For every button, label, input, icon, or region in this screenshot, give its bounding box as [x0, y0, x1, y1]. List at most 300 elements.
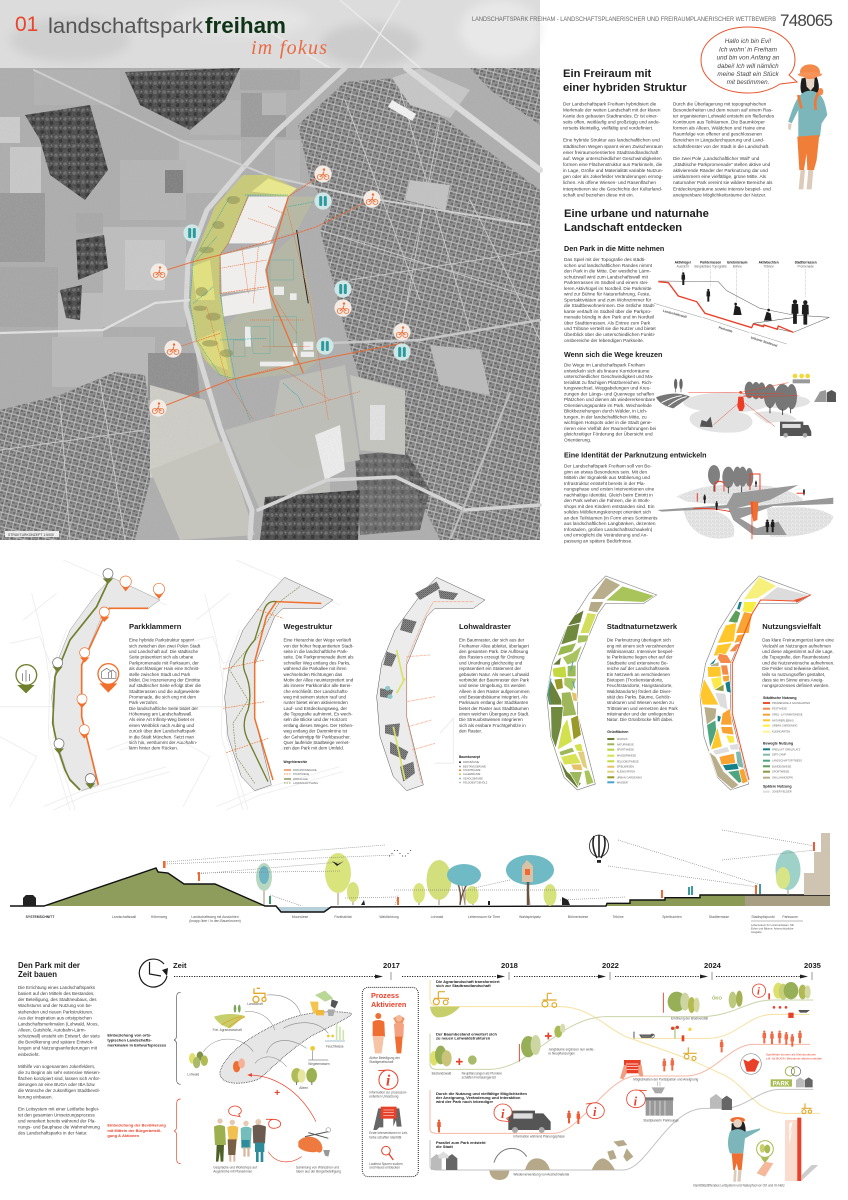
panel: design inputs [107, 988, 352, 1173]
map panel: Wegestruktur [173, 560, 354, 810]
text: time build: derungen an eine BUGA oder IBA bzw. [18, 1082, 96, 1087]
farmland fields [0, 68, 345, 540]
map text: Wildnisansatz. Intensiver bespiel- [607, 649, 674, 654]
map text: Ein Baumraster, der sich aus der [459, 638, 525, 643]
text: time build: und verankert bereits während der Pla- [18, 1119, 96, 1124]
map text: repräsentiert ein Statement der [459, 666, 522, 671]
text: time build: des Landschaftsparks in der Natur. [18, 1131, 88, 1136]
stream headings: Durch die Nutzung und vielfältige Möglichkeiten [436, 1091, 528, 1096]
existing trees [430, 1046, 477, 1066]
section labels: Landschaftsweg mit Aussichten [191, 915, 239, 919]
diagram labels: Aussicht [677, 265, 689, 269]
text: Wege kreuzen: entwickeln sich als lineare Korridorräume [564, 368, 650, 373]
caption: Information zur prozessori- [369, 1091, 407, 1095]
diagram labels: Bühne [733, 265, 742, 269]
text: Wege kreuzen: Orientierung. [564, 437, 591, 442]
excavated soil [489, 1158, 615, 1180]
text: time build: stehenden und neuen Parkstrukturen. [18, 1009, 93, 1014]
map text: die Topografie aufnimmt. Es wech- [284, 712, 353, 717]
text: Identität: Der Landschaftspark Freiham soll von Be- [564, 464, 652, 469]
text: Wege kreuzen: Orientierungspunkte im Park. Wechselnde [564, 403, 652, 408]
pavilion: i [634, 1094, 638, 1108]
diagram labels: Parkterrassen [700, 261, 721, 265]
info stele [785, 1118, 818, 1181]
planting captions: Neupflanzungen als Pioniere [462, 1071, 502, 1075]
recycling [607, 1140, 633, 1162]
map text: Feuchtstandorte, Hangstandorte, [607, 683, 672, 688]
section labels: Lebensraum für Luzerne/Hasen, Mit [751, 923, 794, 927]
text: Freiraum left column: formen eine Flächenstruktur aus Parkinseln, die [563, 162, 663, 167]
map text: entlang dieses Weges. Der Höhen- [284, 723, 354, 728]
subheading: Den Park in die Mitte nehmen: Den Park in die Mitte nehmen [564, 244, 664, 253]
map text: Als eine Art Infinity-Weg bietet er [129, 717, 195, 722]
speech bubble: meine Stadt ein Stück [717, 71, 779, 78]
legend: Nutzung: LANDSCHAFTSFITNESS [772, 759, 802, 763]
legend: Grünflächen: URBAN GARDENING [617, 775, 642, 779]
map text: und diese abgestimmt auf die Lage, [762, 649, 834, 654]
text: Freiraum left column: interpretieren sie die Geschichte der Kulturland- [563, 186, 663, 191]
map text: zurück über den Landschaftspark [129, 729, 196, 734]
truck caption: Information während Planungsphase [513, 1135, 565, 1139]
map text: strukturen und Wiesen werden zu [607, 700, 674, 705]
car [23, 895, 36, 906]
map text: reiche auf der Landschaftsseite. [607, 666, 670, 671]
diagram: crossing paths [656, 374, 836, 438]
label: landscape features: merkmalen in Entwurfsprozess [107, 1043, 167, 1048]
caption: farbe schaffen Identität [369, 1135, 401, 1139]
map text: Die Parknutzung überlagert sich [607, 638, 671, 643]
map text: Eine hybride Parkstruktur spannt [129, 638, 195, 643]
text: Freiraum left column: Eine hybride Struktur aus landschaftlichen und [563, 138, 660, 143]
stream headings [435, 979, 528, 1149]
legend: Grünflächen: NATURWIESE [617, 742, 634, 746]
map text: Stadtseite und extensivere Be- [607, 660, 668, 665]
captions: Augenhöhe mit Planerinnen [213, 1169, 253, 1173]
text: Park Mitte: onsbereiche der lebendigen Parkseite. [564, 338, 644, 343]
text: Identität: nachhaltige Identität. Gleich beim Eintritt in [564, 492, 653, 497]
stream headings: wird der Park noch lebendiger [435, 1099, 494, 1104]
title: 01 [15, 13, 38, 36]
legend: Nutzung: KLEINGÄRTEN [772, 730, 790, 734]
legend: Wegehierarchie: PARKALLEE [293, 777, 308, 781]
stream headings: Die Agrarlandschaft transformiert [436, 979, 500, 984]
map title: Parkklammern [129, 622, 182, 631]
section labels: (knapp über / in den Baumkronen) [189, 919, 241, 923]
diagram: topography section: Landschaftswall [662, 309, 687, 319]
captions [187, 1002, 344, 1090]
legend: Baumkonzept: FELDOBSTGEHÖLZ [463, 780, 488, 784]
eastern districts [225, 233, 318, 380]
hill and terrain [10, 868, 830, 912]
map panel: Stadtnaturnetzwerk [547, 576, 679, 790]
text: Wege kreuzen: gleichzeitiger Förderung der Übersicht und [564, 431, 653, 437]
young trees [519, 1024, 565, 1062]
text: Identität: passung an spätere Bedürfnisse. [564, 538, 633, 543]
panel heading: Aktivieren [371, 1000, 407, 1009]
captions: Ideen aus der Bürgerbeteiligung [296, 1169, 341, 1173]
section labels: Bühnenwiese [568, 915, 588, 919]
text: time build: Wachstums und der Nutzung von be- [18, 1003, 93, 1008]
section labels: Parkhabitat [334, 915, 352, 919]
speech bubble: Ich wohn' in Freiham [719, 46, 777, 53]
map text: den gesamten Park. Die Auflösung [459, 649, 529, 654]
legend: Nutzung: URBAN GARDENING [772, 724, 798, 728]
stele caption: Identitätsstiftendes Leitsystem und Naturpfad vor Ort und im Netz [693, 1184, 785, 1188]
PARK sign: PARK [773, 1081, 790, 1087]
city streets [0, 90, 540, 540]
map text: des Rasters erzeugt für Ordnung [459, 655, 525, 660]
legend: Nutzung: BUNDESWIESE [772, 764, 791, 768]
food truck [494, 1104, 551, 1133]
re-use arrow [494, 1148, 527, 1163]
text: time build: basiert auf den Mitteln des Bestandes, [18, 991, 95, 996]
section people [163, 842, 815, 905]
speech bubble: mit bestimmen. [727, 79, 769, 86]
diagram: topography section: Parkmitte [718, 325, 733, 334]
text: time build: die Bevölkerung und spätere Entwick- [18, 1040, 94, 1045]
stream headings: Parallel zum Park entsteht [436, 1140, 486, 1145]
map: tree grid [377, 577, 485, 791]
timeline labels: 2022 [602, 961, 619, 970]
map text: Die Streuobstwiesen integrieren [459, 717, 523, 722]
section labels: Tribüne [612, 915, 624, 919]
map text: Eine Hierarchie der Wege verläuft [284, 638, 352, 643]
captions: Frei. Agrarlandschaft [213, 1028, 242, 1032]
icon: Alleen [291, 1068, 317, 1085]
section labels: Landschaftswall [112, 915, 136, 919]
text: Freiraum right column: Kontinuum aus Teilräumen. Die Baumkörper [673, 120, 765, 125]
map text: Vielzahl an Nutzungen aufnehmen [762, 643, 832, 648]
icon: flowers and reeds [308, 1023, 345, 1060]
map text: einen Weitblick nach Aubing und [129, 723, 194, 728]
text: Freiraum right column: ter organisierten Lohwald entsteht ein fließendes [673, 113, 775, 118]
heading: Den Park mit der Zeit bauen: Zeit bauen [18, 970, 57, 979]
timeline labels: 2018 [501, 961, 518, 970]
text: Park Mitte: den Park in die Mitte. Der westliche Lärm- [564, 269, 651, 274]
icon: tractor [253, 988, 266, 1002]
captions: Feuchtwiese [326, 1045, 344, 1049]
field [430, 1007, 460, 1017]
map text: Natur. Die Grünbrücke hilft dabei. [607, 717, 673, 722]
diagram labels: Erlebnisraum [727, 261, 748, 265]
timeline labels [173, 961, 822, 970]
icon: fields [214, 1005, 245, 1028]
text: Freiraum right column: Die zwei Pole „Landschaftlicher Wall“ und [673, 156, 760, 161]
text: time build: Mithilfe von sogenannten Jokerfeldern, [18, 1064, 95, 1069]
map text: während die Parkallee mit ihren [284, 666, 347, 671]
icon: wish collection [298, 1128, 331, 1157]
captions: Wegeterrassen [308, 1062, 330, 1066]
legend: Nutzung: Städtische Nutzung [763, 696, 797, 700]
section labels: Ausgabe [751, 930, 762, 934]
legend: Baumkonzept: GEHÖLZBÄUME [463, 776, 483, 780]
new housing [431, 1094, 732, 1170]
text: Identität: solides Möblierungskonzept orientiert sich [564, 510, 651, 515]
text: Park Mitte: Parkterrassen im Südteil und einem stei- [564, 280, 649, 285]
icon: two residents [373, 1013, 405, 1053]
section labels: Eulen und Bäume, Artenschützliche [751, 926, 794, 930]
legend: Wegehierarchie: LANDSCHAFTSWEG [293, 781, 318, 785]
panel: development streams [430, 979, 823, 1188]
map text: zen den Park mit dem Umfeld. [284, 746, 344, 751]
map: usage diversity [700, 576, 811, 790]
map text: Parksaum entlang der Stadtkanten [459, 700, 529, 705]
label: population: gung & Aktionen [107, 1133, 140, 1138]
captions: Alleen [299, 1086, 308, 1090]
map text: Park verzahnt. [129, 700, 158, 705]
stream headings: der Aneignung, Veränderung und Interaktion [436, 1095, 521, 1100]
text: Identität: nungsphase und ersten Interventionen eine [564, 487, 655, 492]
text: Freiraum right column: Besonderheiten und dem neuen auf einem Ras- [673, 107, 773, 112]
cycling network [158, 174, 402, 420]
bracket: population [174, 1099, 181, 1164]
competition line: LANDSCHAFTSPARK FREIHAM - LANDSCHAFTSPLANERISCHER UND FREIRAUMPLANERISCHER WETTBEWERB [472, 17, 776, 23]
crowd [662, 1031, 802, 1071]
map text: in die Stadt München. Setzt man [129, 734, 195, 739]
upper right trees [663, 991, 743, 1013]
section labels: Waldlichtung [379, 915, 399, 919]
text: Identität: Infrastruktur entsteht bereits in der Pla- [564, 481, 645, 486]
legend: Baumkonzept: STADTBÄUME [463, 768, 481, 772]
label: population: Einbeziehung der Bevölkerung [107, 1123, 166, 1128]
planting captions [432, 1071, 502, 1079]
section labels: Höhenweg [151, 915, 167, 919]
captions: Sammlung von Wünschen und [296, 1165, 339, 1169]
map text: Waldstandorte) fördert die Diver- [607, 689, 672, 694]
map text: te Parkräume liegen eher auf der [607, 655, 673, 660]
map text: weg entlang der Dammkrone ist [284, 729, 348, 734]
title [15, 13, 327, 59]
section labels: SYSTEMSCHNITT [26, 915, 55, 919]
section labels: Moorwiese [292, 915, 308, 919]
text: Identität: an den Teilräumen (in Form eines Sortiments [564, 515, 658, 520]
diagram: topography section [654, 261, 829, 348]
legend: Nutzung: PROMENADE & SAUMGARTEN [772, 701, 810, 705]
text: Wege kreuzen: Blickbeziehungen durch Wälder, in Lich- [564, 409, 648, 414]
speech bubbles [229, 1106, 281, 1128]
map text: runter bietet einen aktivierenden [284, 700, 348, 705]
section labels: Lebensraum für Tiere [468, 915, 500, 919]
text: time build: Die Errichtung eines Landschaftsparks [18, 985, 96, 990]
map text: schneller Weg entlang des Parks, [284, 660, 350, 665]
heading: Den Park mit der Zeit bauen: Den Park mit der [18, 961, 80, 970]
bracket: landscape [174, 992, 181, 1084]
eco label: ÖKO [712, 996, 722, 1001]
wheelbarrow caption: Möglichkeiten der Partizipation und Aneignung [633, 1078, 698, 1082]
map text: bildet. Die Inszenierung der Eintritte [129, 677, 201, 682]
map: park brackets [0, 560, 170, 810]
map text: stelle zwischen Stadt und Park [129, 672, 191, 677]
PARK sign [771, 1067, 813, 1087]
map text: teils so nutzungsoffen gestaltet, [762, 672, 825, 677]
map text: che erschließt. Der Landschafts- [284, 689, 349, 694]
phone pin [757, 1141, 773, 1177]
hot air balloon [590, 835, 608, 863]
map text: verbindet der Baumraster den Park [459, 677, 530, 682]
icon: Lohwald trees [189, 1051, 208, 1068]
map text: der Geheimtipp für Parkbesucher. [284, 734, 351, 739]
legend: Wegehierarchie: STADTWEGE [293, 772, 310, 776]
built blocks [245, 287, 314, 366]
legend: Baumkonzept: PARKBÄUME [463, 760, 479, 764]
map text: den Raster. [459, 729, 482, 734]
map text: sich zwischen den zwei Polen Stadt [129, 643, 201, 648]
stream headings: zu neuen Lohwaldstrukturen [436, 1036, 491, 1041]
icon: signboard figures [373, 1107, 402, 1130]
text: Freiraum right column: naturnaher Park vereint sie wildere Bereiche als [673, 180, 773, 185]
map text: Motiv der Allee neuinterpretiert und [284, 677, 354, 682]
caption: Erste Interventionen in Leit- [369, 1131, 408, 1135]
roads [0, 68, 540, 538]
text: Park Mitte: wird zur Bühne für Naturerfahrung, Feste, [564, 292, 650, 297]
label: landscape features: typischen Landschafts- [107, 1038, 152, 1043]
two residents and info: i [593, 1105, 597, 1119]
caption: Aktive Beteiligung der [369, 1056, 400, 1060]
label: landscape features: Einbeziehung von orts- [107, 1033, 152, 1038]
text: time build: Aus der Inspiration aus ortstypischen [18, 1015, 92, 1020]
text: Freiraum left column: Kante des gebauten Stadtrandes. Er ist einer- [563, 113, 659, 118]
text: Park Mitte: die Stadtbewohnerinnen. Die östliche Stadt- [564, 303, 656, 308]
legend: Baumkonzept: BESTANDSBÄUME [463, 764, 486, 768]
speech bubble [701, 27, 797, 93]
map text: gebauten Natur. Als neuer Lohwald [459, 672, 530, 677]
text: Freiraum right column: „Städtische Parkpromenade“ stellen aktive und [673, 162, 771, 167]
young trees caption: re Neupflanzungen [548, 1052, 575, 1056]
diagram labels: Tribüne [763, 265, 774, 269]
map text: sich als essbare Fruchtgehölze in [459, 723, 526, 728]
plan scale label [5, 531, 59, 537]
legend: Grünflächen: Grünflächen [607, 730, 628, 734]
text: Freiraum right column: Entdeckungsräume sowie intensiv bespiel- und [673, 186, 771, 191]
caption: entierten Umsetzung [369, 1094, 399, 1098]
map text: Seite präsentiert sich als urbane [129, 655, 194, 660]
tower and stair buildings [804, 833, 830, 895]
park master plan [158, 174, 402, 420]
industrial zones [270, 68, 490, 480]
map text: auf städtischer Seite erfolgt über die [129, 683, 202, 688]
timeline labels: Zeit [173, 961, 187, 970]
map text: Stadtterassen und die aufgeweitete [129, 689, 200, 694]
timeline labels: 2017 [383, 961, 400, 970]
text: Freiraum right column: umklammern eine vielfältige, grüne Mitte. Als [673, 174, 767, 179]
final grove [773, 982, 811, 1000]
map text: seite. Die Parkpromenade dient als [284, 655, 354, 660]
panel heading: Prozess [371, 991, 399, 1000]
text: Freiraum right column: aneignenbare Möglichkeitsräume der Nutzer. [673, 192, 766, 197]
legend: Nutzung: SPIEL- & FORMATWIESE [772, 713, 803, 717]
timeline labels: 2024 [704, 961, 722, 970]
text: Freiraum left column: in Lage, Größe und Materialität variable Nutzun- [563, 168, 663, 173]
text: time build: einbezieht. [18, 1052, 40, 1057]
legend: Grünflächen: FELDOBSTWIESE [617, 759, 639, 763]
text: Park Mitte: Das Spiel mit der Topografie des städti- [564, 257, 646, 262]
caption: Stadtgesellschaft [369, 1060, 393, 1064]
map title: Lohwaldraster [459, 622, 511, 631]
map text: einen weichen Übergang zur Stadt. [459, 711, 529, 717]
map text: Die Felder sind teilweise definiert, [762, 666, 830, 671]
diagram labels [675, 261, 817, 269]
re-use caption: Wiederverwendung von Aushubmaterial [513, 1173, 569, 1177]
text: Identität: Mitteln der Signaletik aus Möblierung und [564, 475, 650, 480]
text: Wege kreuzen: zungen der Längs- und Querwege schaffen [564, 391, 654, 396]
signboard [620, 1060, 643, 1079]
legend: Nutzung: Bewegte Nutzung [763, 742, 793, 746]
text: Freiraum right column: formen als Alleen, Wäldchen und Haine eine [673, 126, 766, 131]
stream headings: sich zur Stadtrandlandschaft [436, 983, 491, 988]
caption: und Neues entdecken [369, 1166, 400, 1170]
notice: Spielfelder können als Kleinstrukturen [766, 1052, 816, 1056]
text: Wege kreuzen: Die Wege im Landschaftspark Freiham [564, 363, 645, 368]
section labels: Lohwald [431, 915, 443, 919]
legend: Grünflächen: WASSERWIESE [617, 754, 636, 758]
map title: Nutzungsvielfalt [762, 622, 821, 631]
map panel: Lohwaldraster [377, 577, 530, 791]
legend: Nutzung: SPORTWIESE [772, 770, 790, 774]
info icon near trees: i [757, 987, 760, 998]
header band [0, 0, 540, 68]
figure: Evi [788, 64, 827, 189]
text: Park Mitte: kante verläuft im Südteil über die Parkpro- [564, 309, 652, 314]
map text: und seine Umgebung. Es werden [459, 683, 526, 688]
text: Wege kreuzen: terialität zu flächigen Platzbereichen. Rich- [564, 380, 653, 385]
plan scale label: STRUKTURKONZEPT 1:5000 [8, 533, 54, 537]
icon: info bubble [378, 1070, 398, 1090]
stream headings: Der Baumbestand erweitert sich [436, 1032, 497, 1037]
map text: sich hin, verstummt der Autobahn- [129, 740, 198, 745]
legend: Nutzung: NATURERLEBNIS [772, 718, 794, 722]
text: Freiraum left column: rerseits kleinteilig, vielfältig und vordefiniert. [563, 126, 653, 131]
map text: seln die Blicke und der Horizont [284, 717, 348, 722]
city areas [0, 68, 540, 540]
title: freiham [205, 13, 286, 38]
diagram labels: Aktivhügel [675, 261, 691, 265]
stream lines [430, 980, 820, 1170]
map text: Biotopen (Trockenstandorte, [607, 677, 663, 682]
legend: Nutzung [763, 696, 810, 794]
map: path structure [173, 560, 343, 810]
icon: core trees [233, 1058, 245, 1072]
map text: Höhenweg am Landschaftswall. [129, 712, 193, 717]
diagram: park identity [657, 465, 833, 539]
speech bubble: dabei! Ich will nämlich [717, 63, 779, 70]
text: Freiraum left column: Merkmale der weiten Landschaft mit der klaren [563, 107, 661, 112]
speech bubble: Hallo ich bin Evi! [725, 38, 772, 45]
text: Identität: ginn an etwas Besonderes sein. Mit den [564, 469, 648, 474]
map text: und die Nutzerwünsche aufnehmen. [762, 660, 834, 665]
text: time build: schutzwall) ensteht ein Entwurf, der stets [18, 1034, 101, 1039]
captions: Lohwald [187, 1073, 199, 1077]
map text: von der höher frequentierten Stadt- [284, 643, 354, 648]
icon: info bubble: i [386, 1073, 391, 1090]
text: Freiraum left column: lichen. Als offene Wiesen- und Rasenflächen [563, 180, 656, 185]
text: Wege kreuzen: unterschiedlicher Geschwindigkeit und Ma- [564, 374, 654, 379]
stream headings: die Stadt [436, 1144, 453, 1149]
heading: Eine urbane Landschaft: Eine urbane und naturnahe [564, 208, 709, 220]
text: Park Mitte: Überblick über die unterschiedlichen Funkti- [564, 331, 656, 337]
timeline [139, 959, 822, 987]
map title: Stadtnaturnetzwerk [607, 622, 678, 631]
legend: Grünflächen [607, 730, 642, 784]
text: Wege kreuzen: wichtigen Hotspots oder in die Stadt gene- [564, 420, 653, 425]
map text: Ein Netzwerk an verschiedenen [607, 672, 670, 677]
diagram: topography section: Urbaner Stadtrand [750, 335, 778, 348]
resident near track [437, 1120, 441, 1132]
text: time build: Ein Leitsystem mit einer Leitfarbe beglei- [18, 1106, 100, 1111]
text: Wege kreuzen: tungen, in der landschaftlichen Mitte, zu [564, 414, 647, 419]
group of residents [214, 1118, 266, 1162]
concept blob [220, 1012, 352, 1083]
text: time build: nungs- und Bauphase die Wahrnehmung [18, 1125, 100, 1130]
